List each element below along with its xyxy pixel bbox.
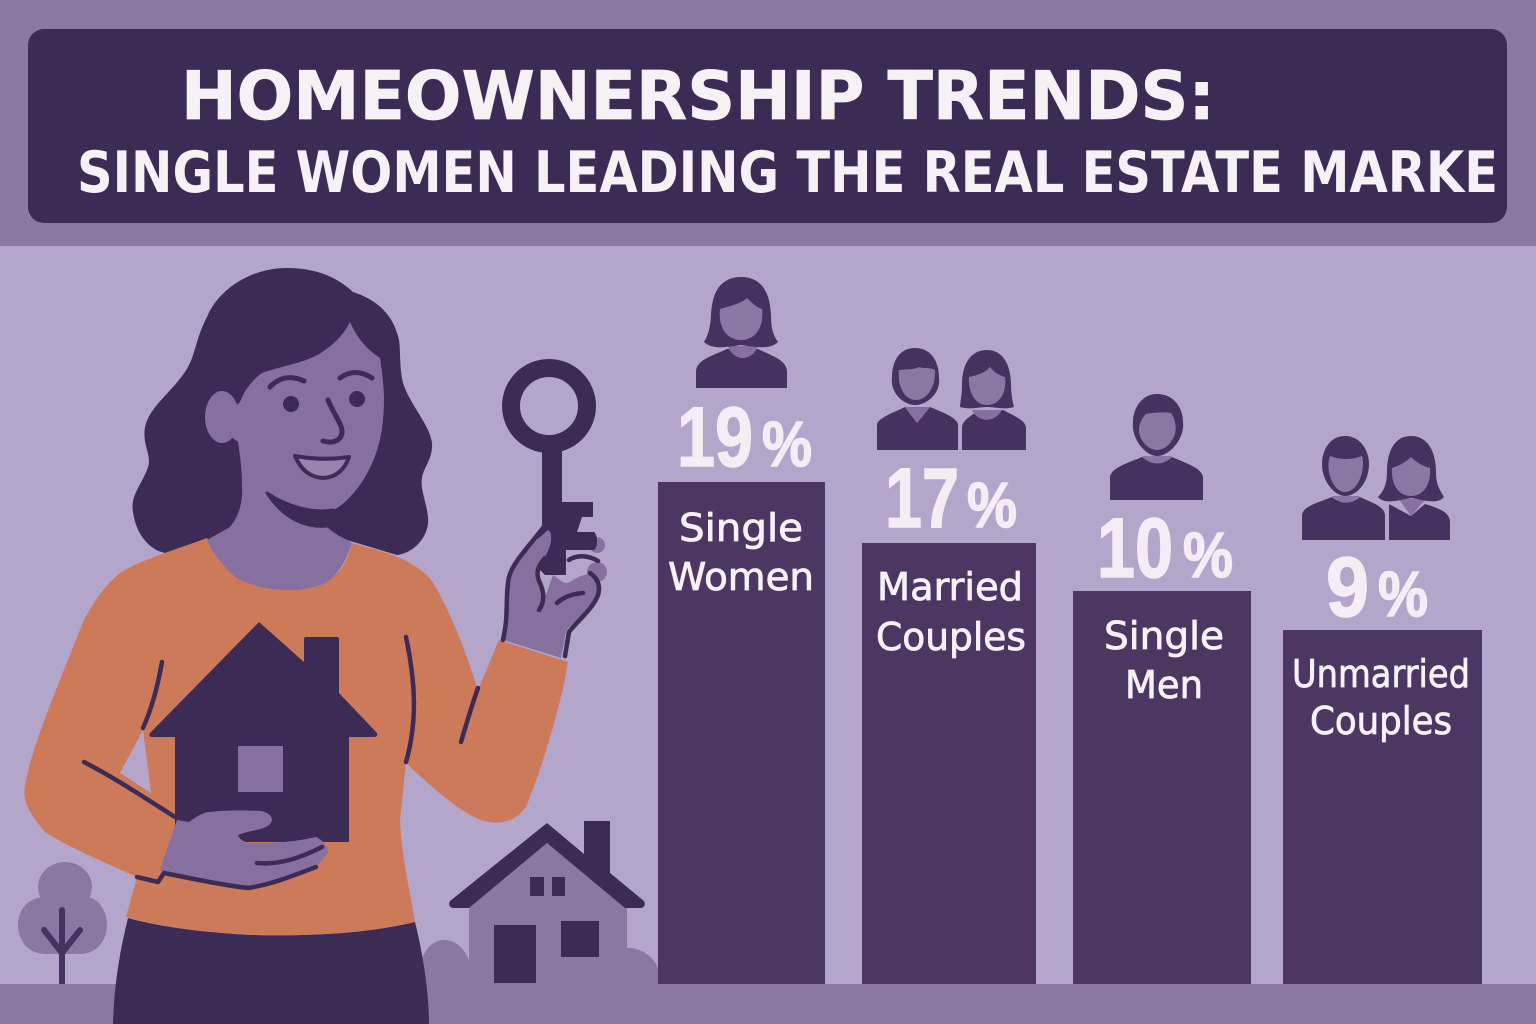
bushes (418, 940, 661, 984)
label (1292, 652, 1470, 743)
value: % (967, 469, 1017, 541)
bar: Married Couples (862, 348, 1036, 984)
label: Women (668, 555, 814, 599)
value (1326, 540, 1428, 634)
title box (28, 29, 1507, 223)
label (668, 506, 814, 599)
sweater fold lines (84, 637, 478, 817)
label: Men (1125, 663, 1203, 707)
label: Couples (1310, 699, 1452, 743)
icon: tree (18, 862, 107, 983)
jaw shadow (267, 493, 333, 526)
icon: unmarried couple (1302, 436, 1450, 540)
value: 9 (1326, 540, 1369, 634)
label: Single (1104, 614, 1224, 658)
holding hand (137, 810, 328, 888)
icon: single woman (696, 277, 787, 388)
value: 19 (677, 390, 753, 484)
ground strip (0, 984, 1536, 1024)
value (1097, 501, 1233, 595)
sweater (24, 538, 568, 935)
icon: key (511, 368, 607, 582)
smile (295, 456, 349, 478)
raised hand (503, 528, 599, 658)
label (876, 565, 1026, 659)
face and neck (207, 322, 384, 590)
bar: Single Women (658, 277, 825, 984)
hair (133, 268, 432, 555)
header band (0, 0, 1536, 246)
nose (323, 400, 342, 442)
value: % (1378, 558, 1428, 630)
skirt (113, 918, 429, 1024)
value: % (1183, 519, 1233, 591)
bar: Unmarried Couples (1283, 436, 1482, 984)
title line 1: HOMEOWNERSHIP TRENDS: (181, 57, 1215, 135)
label: Single (679, 506, 803, 550)
label: Married (877, 565, 1023, 609)
arm gap (120, 730, 151, 793)
value: 17 (885, 451, 959, 545)
label: Unmarried (1292, 652, 1470, 696)
ear (205, 391, 239, 443)
value: % (762, 408, 812, 480)
icon: couple (877, 348, 1026, 450)
value (677, 390, 812, 484)
label: Couples (876, 615, 1026, 659)
value: 10 (1097, 501, 1173, 595)
illustration: woman holding house and key (24, 268, 607, 1024)
icon: single man (1110, 394, 1203, 500)
eyes and brows (270, 372, 372, 412)
house held by woman (149, 622, 377, 842)
bar: Single Men (1073, 394, 1251, 984)
icon: background house (418, 821, 661, 984)
label (1104, 614, 1224, 707)
house window (238, 746, 283, 792)
